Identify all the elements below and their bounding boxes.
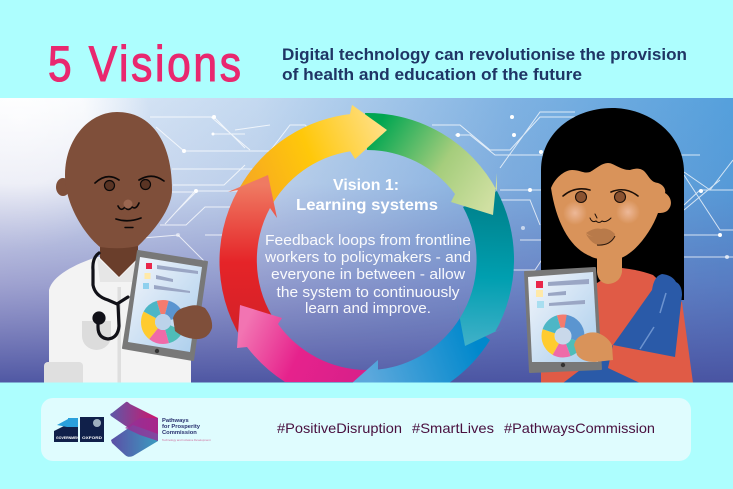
doctor ear bbox=[56, 178, 68, 196]
logo text: Pathways for Prosperity Commission: Technology and Inclusive Development bbox=[162, 438, 211, 442]
subtitle bbox=[282, 46, 687, 84]
logo: University of Oxford: OXFORD bbox=[82, 435, 102, 440]
circuit lines bbox=[120, 112, 733, 270]
vision description bbox=[264, 233, 471, 317]
subtitle: of health and education of the future bbox=[282, 66, 582, 84]
hashtags: #PositiveDisruption bbox=[277, 420, 402, 436]
tablet pie chart bbox=[548, 321, 578, 351]
tablet list bbox=[143, 263, 198, 293]
arrow: yellow bbox=[240, 105, 367, 202]
doctor face bbox=[95, 176, 164, 228]
tablet list bbox=[536, 279, 589, 308]
logo: University of Oxford bbox=[80, 417, 104, 442]
figure: doctor with tablet bbox=[44, 112, 212, 386]
vision heading: Vision 1: bbox=[333, 177, 399, 194]
doctor placket bbox=[118, 287, 121, 383]
figure: woman with tablet bbox=[525, 108, 693, 383]
woman arm bbox=[608, 345, 675, 382]
doctor coat bbox=[49, 257, 191, 383]
logo: Blavatnik School bbox=[54, 418, 82, 442]
subtitle: Digital technology can revolutionise the provision bbox=[282, 46, 687, 64]
woman neck bbox=[597, 255, 622, 284]
woman sari bbox=[563, 274, 682, 383]
woman hair bbox=[541, 108, 684, 300]
woman lips bbox=[586, 228, 615, 245]
tablet pie chart bbox=[148, 307, 178, 337]
footer panel bbox=[41, 398, 691, 461]
doctor collar bbox=[97, 258, 135, 282]
woman tablet bbox=[525, 268, 601, 372]
hashtags bbox=[277, 420, 655, 436]
vision heading bbox=[296, 177, 438, 214]
arrow: teal bbox=[457, 191, 514, 346]
vision description: the system to continuously bbox=[276, 285, 460, 301]
circuit nodes bbox=[176, 115, 729, 259]
doctor tablet bbox=[123, 251, 207, 360]
doctor pocket bbox=[82, 321, 111, 350]
logo: Pathways diamond bbox=[110, 402, 158, 457]
cycle diagram: six arrows bbox=[219, 105, 514, 383]
stethoscope bbox=[93, 253, 128, 339]
arrow: green bbox=[365, 113, 497, 215]
woman features bbox=[563, 189, 638, 222]
title: 5 Visions bbox=[48, 36, 241, 92]
doctor nose bbox=[124, 200, 132, 208]
woman face bbox=[551, 163, 671, 260]
arrow: blue bbox=[352, 318, 490, 383]
vision description: everyone in between - allow bbox=[271, 267, 466, 283]
doctor cuff bbox=[44, 362, 83, 382]
woman blush bbox=[564, 202, 638, 224]
vision description: learn and improve. bbox=[305, 301, 431, 317]
logo: Blavatnik School: GOVERNMENT bbox=[56, 436, 82, 440]
logo text: Pathways for Prosperity Commission: Pathways bbox=[162, 418, 189, 424]
sari highlights bbox=[640, 293, 666, 349]
hashtags: #PathwaysCommission bbox=[504, 420, 655, 436]
doctor neck bbox=[100, 245, 138, 277]
doctor head bbox=[65, 112, 172, 248]
doctor hand bbox=[173, 305, 212, 339]
vision description: workers to policymakers - and bbox=[264, 250, 471, 266]
woman hand bbox=[574, 332, 613, 362]
hashtags: #SmartLives bbox=[412, 420, 494, 436]
vision heading: Learning systems bbox=[296, 197, 438, 214]
arrow: yellow head bbox=[350, 105, 387, 159]
central circle tint bbox=[257, 150, 477, 370]
arrow: pink bbox=[237, 305, 367, 382]
banner background bbox=[0, 98, 733, 382]
logo text: Pathways for Prosperity Commission: Commission bbox=[162, 430, 197, 436]
logo text: Pathways for Prosperity Commission bbox=[162, 418, 211, 442]
logo text: Pathways for Prosperity Commission: for Prosperity bbox=[162, 424, 201, 430]
vision description: Feedback loops from frontline bbox=[265, 233, 471, 249]
woman body bbox=[541, 268, 693, 383]
arrow: red bbox=[219, 175, 277, 347]
